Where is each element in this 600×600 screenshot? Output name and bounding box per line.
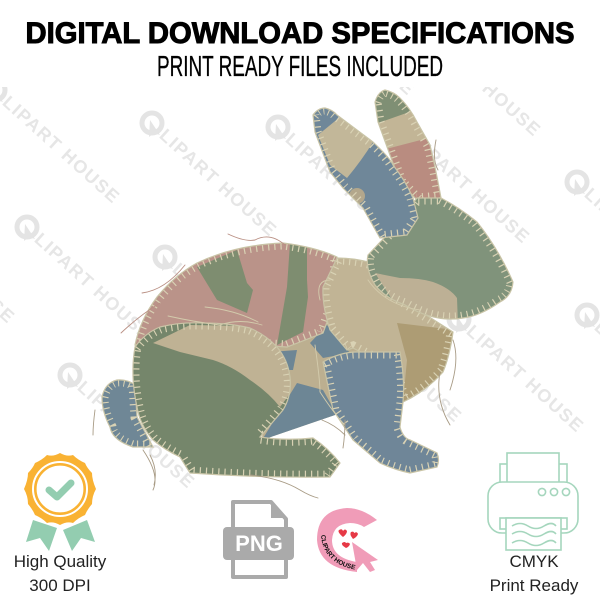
patch: belly xyxy=(262,324,358,438)
label: CMYK print ready xyxy=(490,552,579,595)
label: high quality xyxy=(14,552,107,595)
icon: clipart house logo xyxy=(317,508,378,572)
subtitle: PRINT READY FILES INCLUDED xyxy=(157,51,443,83)
patch: chest xyxy=(320,255,455,405)
icon: quality badge xyxy=(24,453,96,551)
icon: clipart house logo: CLIPART HOUSE xyxy=(321,535,356,570)
label: high quality: 300 DPI xyxy=(29,576,91,595)
patch: left ear xyxy=(308,105,423,240)
patch: haunch xyxy=(130,320,345,480)
label: CMYK print ready: CMYK xyxy=(509,552,559,571)
icon: PNG file xyxy=(223,501,294,577)
watermark pattern xyxy=(0,87,600,488)
patch: right ear xyxy=(374,89,442,199)
patch: front leg xyxy=(320,350,440,475)
rabbit patchwork illustration xyxy=(93,85,516,498)
patch: head xyxy=(366,197,514,320)
patch: tail xyxy=(101,379,154,448)
loose threads xyxy=(93,140,456,498)
label: CMYK print ready: Print Ready xyxy=(490,576,579,595)
icon: printer xyxy=(488,453,578,550)
title: DIGITAL DOWNLOAD SPECIFICATIONS xyxy=(26,17,574,50)
icon: PNG file: PNG xyxy=(235,531,283,556)
patch: back xyxy=(130,240,340,350)
label: high quality: High Quality xyxy=(14,552,107,571)
